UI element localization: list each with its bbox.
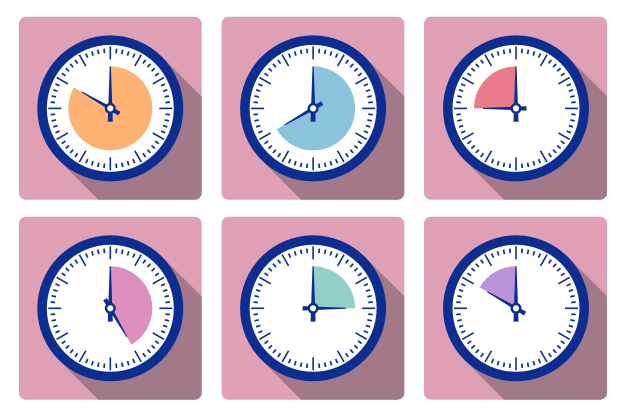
clock face [452,45,580,172]
minute hand [311,266,316,322]
centre hub [106,104,115,113]
tick marks [48,46,172,170]
minute hand [108,66,113,122]
long shadow [59,57,202,200]
orange time sector [68,66,152,150]
panel: clock at 5:00 with pink sector [19,217,202,400]
clock rim [37,235,183,381]
tile background [424,17,607,200]
minute hand [514,66,518,122]
long shadow [464,57,607,200]
clock face [250,245,377,372]
hour hand [283,101,323,127]
panel: clock at 10:00 with purple sector [424,217,607,400]
clock face [452,245,580,372]
panel: clock at 10:00 with orange sector [19,17,202,200]
centre hub [512,304,520,313]
hour hand [81,90,120,116]
clock face [47,45,174,172]
tile background [19,17,202,200]
teal time sector [313,266,355,308]
purple time sector [480,266,516,308]
hour hand [303,306,346,310]
long shadow [464,257,607,400]
blue time sector [277,66,355,150]
long shadow [262,57,404,200]
long shadow [59,257,202,400]
panel: clock at 3:00 with teal sector [222,217,404,400]
clock rim [443,235,589,381]
tick marks [454,246,578,370]
centre hub [309,304,317,313]
clock rim [240,35,386,181]
clock face [250,45,377,172]
centre hub [512,104,520,113]
panel: clock at 9:00 with red sector [424,17,607,200]
clock rim [443,35,589,181]
clock rim [240,235,386,381]
tick marks [48,246,172,370]
minute hand [108,266,113,322]
hour hand [483,106,526,111]
panel: clock at 8:00 with blue sector [222,17,404,200]
clock rim [37,35,183,181]
pink time sector [110,266,152,345]
red time sector [474,66,516,108]
minute hand [514,266,518,322]
centre hub [106,304,115,313]
tile background [424,217,607,400]
hour hand [103,298,129,338]
clock face [47,245,174,372]
hour hand [486,290,526,315]
tile background [19,217,202,400]
tick marks [454,46,578,170]
minute hand [311,66,316,122]
centre hub [309,104,317,113]
tick marks [251,46,375,170]
tile background [222,17,404,200]
tile background [222,217,404,400]
long shadow [262,257,404,400]
tick marks [251,246,375,370]
